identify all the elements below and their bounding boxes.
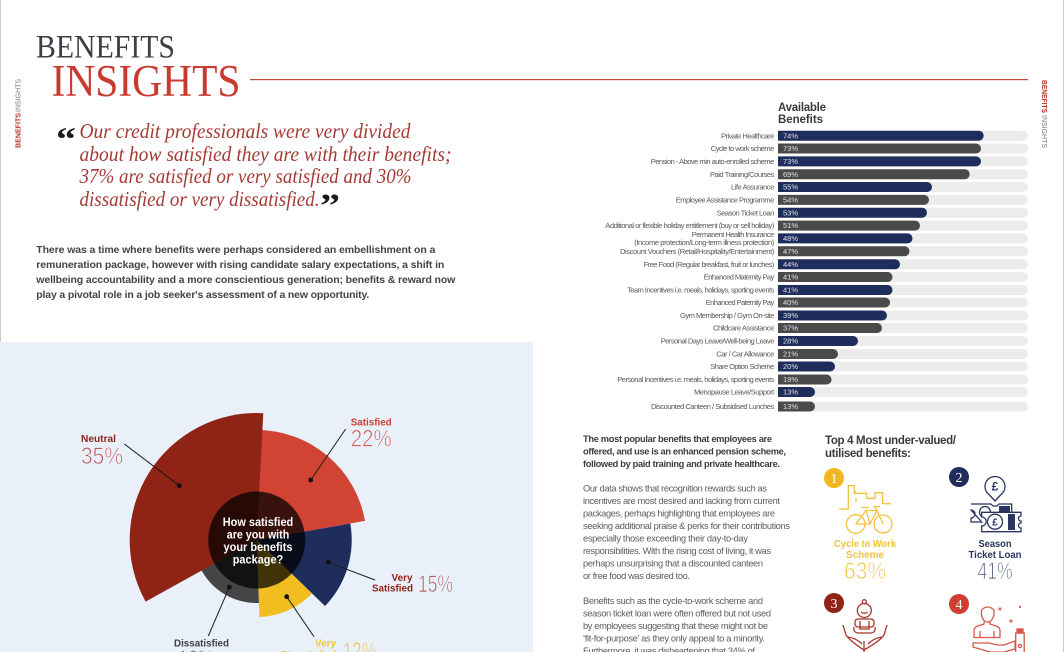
bar: Cycle to work scheme 73%: Cycle to work scheme [711, 144, 774, 153]
pull quote: ” [320, 188, 340, 224]
bar: Childcare Assistance 37%: 37% [783, 324, 798, 333]
text block: recognition rewards: seeking additional praise & perks for their contributions [583, 521, 790, 531]
heading: available benefits: Available [778, 102, 826, 114]
panel: satisfaction chart [0, 342, 533, 652]
text block: under-used benefits: ‘fit-for-purpose’ as they only appeal to a minority. [583, 634, 765, 644]
label: very satisfied: 15% [418, 571, 453, 598]
text block: recognition rewards: packages, perhaps highlighting that employees are [583, 508, 775, 518]
heading: top 4 under-valued [825, 435, 957, 460]
text block: popular benefits lead: followed by paid training and private healthcare. [583, 459, 780, 469]
bar: Paid Training 69%: 69% [783, 170, 798, 179]
item 3: childcare [824, 593, 887, 652]
bar: Share Option Scheme 20%: Share Option Scheme [710, 362, 774, 371]
label: cycle to work scheme: 63% [844, 558, 886, 585]
text block: under-used benefits: by employees suggesting that these might not be [583, 621, 768, 631]
bar: Cycle to work scheme 73% [711, 144, 1028, 154]
icon: tickets with pound coin [971, 476, 1021, 532]
bar: Discount Vouchers 47%: 47% [783, 247, 798, 256]
left side running label [14, 79, 22, 148]
icon: baby in hands [843, 600, 887, 652]
left side running label: BENEFITS [14, 113, 22, 148]
label: very satisfied [372, 571, 453, 598]
pull quote: 37% are satisfied or very satisfied and 30% [79, 164, 412, 188]
bar: Gym Membership 39% [680, 310, 1028, 320]
label: season ticket loan: Season [978, 539, 1012, 550]
text block: recognition rewards: or free food was desired too. [583, 571, 690, 581]
intro paragraph: remuneration package, however with rising candidate salary expectations, a shift in [36, 259, 444, 271]
bar: Cycle to work scheme 73%: 73% [783, 144, 798, 153]
bar: Private Healthcare 74% [721, 131, 1028, 141]
bar: Car Allowance 21%: Car / Car Allowance [716, 350, 774, 359]
right side running label: INSIGHTS [1040, 115, 1049, 148]
label: cycle to work scheme: Cycle to Work [834, 539, 896, 550]
leader lines [124, 429, 375, 637]
intro paragraph: wellbeing accountability and a more conscientious generation; benefits & reward now [35, 274, 456, 286]
heading: available benefits: Benefits [778, 114, 823, 126]
bar: Personal Days Leave 28%: 28% [783, 337, 798, 346]
intro paragraph [35, 244, 456, 301]
badge 2: 2 [956, 471, 962, 486]
label: season ticket loan [968, 539, 1022, 585]
bar: Pension 73%: 73% [783, 157, 798, 166]
bar: Enhanced Maternity Pay 41%: 41% [783, 273, 798, 282]
bar: Paid Training 69%: Paid Training/Courses [710, 170, 775, 179]
pull quote: “ [56, 122, 76, 158]
bar: Enhanced Maternity Pay 41%: Enhanced Maternity Pay [704, 273, 775, 282]
text block: recognition rewards: Our data shows that recognition rewards such as [583, 484, 767, 494]
bar: Share Option Scheme 20%: 20% [783, 362, 798, 371]
bar: Permanent Health Insurance 48%: (Income protection/Long-term illness protection) [634, 238, 775, 247]
label: very dissatisfied [281, 638, 377, 652]
label: very satisfied: Satisfied [372, 583, 413, 595]
bar: Life Assurance 55%: 55% [783, 183, 798, 192]
bar: Season Ticket Loan 53%: 53% [783, 208, 798, 217]
bar: Employee Assistance Programme 54%: Employee Assistance Programme [676, 196, 774, 204]
bar: Childcare Assistance 37%: Childcare Assistance [713, 324, 774, 333]
bar: Personal Incentives 19%: 19% [783, 375, 798, 384]
label: dissatisfied: Dissatisfied [174, 638, 229, 650]
chart centre question: package? [233, 554, 283, 566]
bar: Season Ticket Loan 53%: Season Ticket Loan [717, 208, 774, 217]
label: cycle to work scheme: Scheme [846, 550, 884, 561]
bar: Discount Vouchers 47%: Discount Vouchers (Retail/Hospitality/Entertainment) [620, 247, 775, 256]
text block: recognition rewards: especially those exceeding their day-to-day [583, 534, 748, 544]
text block: recognition rewards: responsibilities. With the rising cost of living, it was [583, 546, 771, 556]
label: season ticket loan: 41% [978, 558, 1012, 585]
bar: Personal Days Leave 28%: Personal Days Leave/Well-being Leave [661, 337, 774, 346]
item 2: season ticket loan [949, 467, 1022, 585]
bar: Enhanced Paternity Pay 40%: Enhanced Paternity Pay [706, 298, 775, 307]
bar: Car Allowance 21%: 21% [783, 350, 798, 359]
bar: Personal Days Leave 28% [661, 336, 1028, 346]
pull quote: dissatisfied or very dissatisfied. [80, 187, 320, 211]
badge 3: 3 [830, 597, 838, 612]
pull quote [56, 119, 452, 224]
bar: Gym Membership 39%: Gym Membership / Gym On-site [680, 311, 774, 320]
label: satisfied: 22% [351, 426, 392, 453]
text block: popular benefits lead: offered, and use is an enhanced pension scheme, [583, 446, 786, 456]
text block: under-used benefits: Benefits such as the cycle-to-work scheme and [583, 596, 763, 606]
label: satisfied: Satisfied [351, 416, 392, 428]
bar: Menopause Leave 13%: Menopause Leave/Support [694, 388, 775, 397]
bar: Enhanced Maternity Pay 41% [704, 272, 1028, 282]
bar: Gym Membership 39%: 39% [783, 311, 798, 320]
heading: available benefits [778, 102, 826, 126]
bar: Permanent Health Insurance 48%: Permanent Health Insurance [692, 230, 774, 239]
text block: recognition rewards: perhaps unsurprising that a discounted canteen [583, 558, 763, 568]
text block: under-used benefits [583, 596, 771, 652]
bar: Additional holiday 51%: 51% [783, 221, 798, 230]
bar: Share Option Scheme 20% [710, 362, 1028, 372]
icon: tickets with pound coin: £ [992, 480, 999, 494]
bar: Paid Training 69% [710, 169, 1028, 179]
text block: under-used benefits: season ticket loan were often offered but not used [583, 608, 771, 618]
chart: satisfaction radial pie [130, 413, 365, 617]
heading: top 4 under-valued: Top 4 Most under-valued/ [825, 435, 957, 447]
pull quote: Our credit professionals were very divided [80, 119, 411, 143]
icon: city and bicycle [839, 486, 892, 533]
bar: Free Food 44%: 44% [783, 260, 798, 269]
bar: Pension 73%: Pension - Above min auto-enrolled scheme [651, 157, 774, 166]
title [36, 30, 1028, 106]
label: neutral [81, 433, 123, 470]
bar: Pension 73% [651, 156, 1028, 166]
text block: recognition rewards: incentives are most desired and lacking from current [583, 496, 780, 506]
bar: Private Healthcare 74%: Private Healthcare [721, 131, 774, 140]
chart centre question: How satisfied [223, 517, 293, 529]
bar: Car Allowance 21% [716, 349, 1028, 359]
chart centre question [223, 517, 293, 566]
bar: Additional holiday 51% [605, 221, 1028, 231]
item 1: cycle to work [824, 468, 896, 585]
bar: Menopause Leave 13%: 13% [783, 388, 798, 397]
left side running label: INSIGHTS [14, 79, 22, 112]
badge 1: 1 [830, 472, 838, 487]
bar: Team Incentives 41%: Team Incentives i.e. meals, holidays, sporting events [627, 286, 775, 295]
bar: Discounted Canteen 13% [651, 402, 1028, 412]
chart centre question: are you with [227, 530, 289, 542]
right side running label: BENEFITS [1040, 80, 1049, 113]
label: satisfied [351, 416, 392, 453]
bar: Enhanced Paternity Pay 40% [706, 298, 1028, 308]
heading: top 4 under-valued: utilised benefits: [825, 448, 911, 460]
bar: Life Assurance 55% [731, 182, 1028, 192]
bar: Team Incentives 41%: 41% [783, 286, 798, 295]
item 4: wellbeing [949, 594, 1024, 652]
bar: Season Ticket Loan 53% [717, 208, 1028, 218]
label: neutral: Neutral [81, 433, 116, 445]
intro paragraph: play a pivotal role in a job seeker's assessment of a new opportunity. [36, 289, 369, 301]
text block: recognition rewards [583, 484, 790, 581]
badge 4: 4 [956, 598, 962, 613]
label: season ticket loan: Ticket Loan [968, 550, 1022, 561]
bar: Personal Incentives 19% [617, 374, 1028, 384]
bar: Employee Assistance Programme 54%: 54% [783, 196, 798, 204]
bar: Life Assurance 55%: Life Assurance [731, 183, 774, 192]
pull quote: about how satisfied they are with their benefits; [80, 142, 452, 166]
icon: person with bottle and hand [973, 606, 1024, 652]
bar: Childcare Assistance 37% [713, 323, 1028, 333]
bar: Free Food 44% [644, 259, 1028, 269]
bar: Additional holiday 51%: Additional or flexible holiday entitlement (buy or sell holiday) [605, 221, 775, 230]
chart centre question: your benefits [224, 542, 292, 554]
text block: popular benefits lead: The most popular benefits that employees are [583, 434, 772, 444]
intro paragraph: There was a time where benefits were perhaps considered an embellishment on a [36, 244, 435, 256]
bar: Menopause Leave 13% [694, 387, 1028, 397]
label: cycle to work scheme [834, 539, 896, 585]
bar: Private Healthcare 74%: 74% [783, 131, 798, 140]
bar: Employee Assistance Programme 54% [676, 195, 1028, 205]
bar: Personal Incentives 19%: Personal Incentives i.e. meals, holidays, sporting events [617, 375, 775, 384]
bar: Permanent Health Insurance 48%: 48% [783, 234, 798, 243]
icon: tickets with pound coin: £ [992, 518, 998, 528]
label: very dissatisfied: Very [315, 638, 336, 650]
title: INSIGHTS [52, 56, 240, 106]
bar chart: available benefits [605, 131, 1028, 411]
label: neutral: 35% [81, 443, 123, 470]
bar: Discount Vouchers 47% [620, 246, 1028, 256]
title: BENEFITS [36, 30, 175, 66]
bar: Permanent Health Insurance 48% [634, 230, 1028, 247]
bar: Discounted Canteen 13%: Discounted Canteen / Subsidised Lunches [651, 402, 775, 411]
text block: popular benefits lead [583, 434, 786, 469]
bar: Free Food 44%: Free Food (Regular breakfast, fruit or lunches) [644, 260, 775, 269]
bar: Team Incentives 41% [627, 285, 1028, 295]
bar: Discounted Canteen 13%: 13% [783, 402, 798, 411]
right side running label [1040, 80, 1049, 148]
bar: Enhanced Paternity Pay 40%: 40% [783, 298, 798, 307]
label: very satisfied: Very [392, 572, 413, 584]
